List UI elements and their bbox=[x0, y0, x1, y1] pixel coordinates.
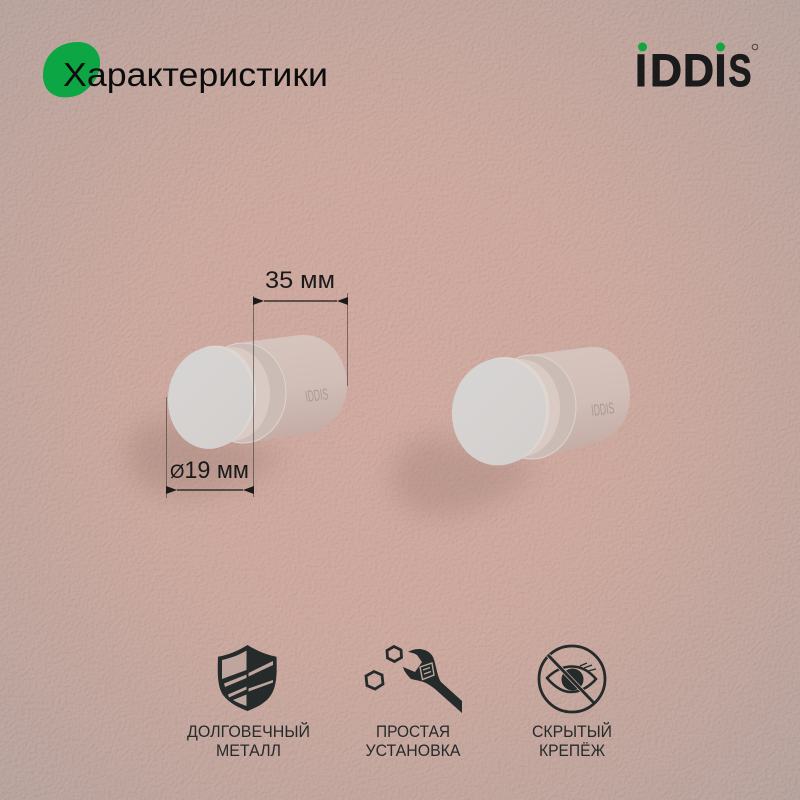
heading: Характеристики: Характеристики bbox=[63, 57, 328, 94]
neck bbox=[488, 355, 576, 459]
face bbox=[447, 354, 551, 470]
icon: shield bbox=[218, 645, 277, 711]
feature: hidden mount: КРЕПЁЖ bbox=[539, 742, 605, 760]
dimension: diameter 19 mm bbox=[166, 397, 249, 498]
feature: durable metal bbox=[187, 645, 310, 760]
product: left hook bbox=[126, 335, 347, 496]
label: ДОЛГОВЕЧНЫЙ bbox=[187, 722, 310, 741]
logo: IDDIS bbox=[635, 42, 758, 96]
dimension: 35 mm: 35 мм bbox=[265, 267, 335, 294]
icon: crossed eye bbox=[539, 646, 605, 712]
engraved logo: IDDIS bbox=[590, 400, 615, 420]
product: right hook bbox=[391, 347, 630, 516]
logo: IDDIS: I bbox=[714, 45, 726, 96]
logo: IDDIS: I bbox=[635, 45, 647, 96]
heading: Характеристики bbox=[43, 42, 328, 97]
feature: easy installation: УСТАНОВКА bbox=[366, 742, 461, 760]
icon: nuts and wrench bbox=[366, 646, 462, 713]
cylinder base bbox=[245, 335, 347, 443]
logo: IDDIS: D bbox=[683, 45, 714, 96]
neck bbox=[200, 343, 286, 443]
engraved logo: IDDIS bbox=[304, 386, 329, 406]
logo: IDDIS: D bbox=[650, 45, 682, 96]
shadow bbox=[126, 419, 285, 496]
logo: IDDIS: S bbox=[728, 45, 752, 96]
feature: easy installation bbox=[366, 646, 462, 760]
label: ПРОСТАЯ bbox=[376, 723, 450, 741]
shadow bbox=[391, 436, 540, 516]
dimension: diameter 19 mm: Ø19 мм bbox=[170, 457, 249, 484]
feature: durable metal: МЕТАЛЛ bbox=[216, 742, 281, 760]
green blob bbox=[43, 42, 100, 97]
cylinder base bbox=[535, 347, 630, 457]
feature: hidden mount bbox=[532, 646, 612, 760]
label: СКРЫТЫЙ bbox=[532, 722, 612, 741]
face bbox=[163, 343, 258, 453]
